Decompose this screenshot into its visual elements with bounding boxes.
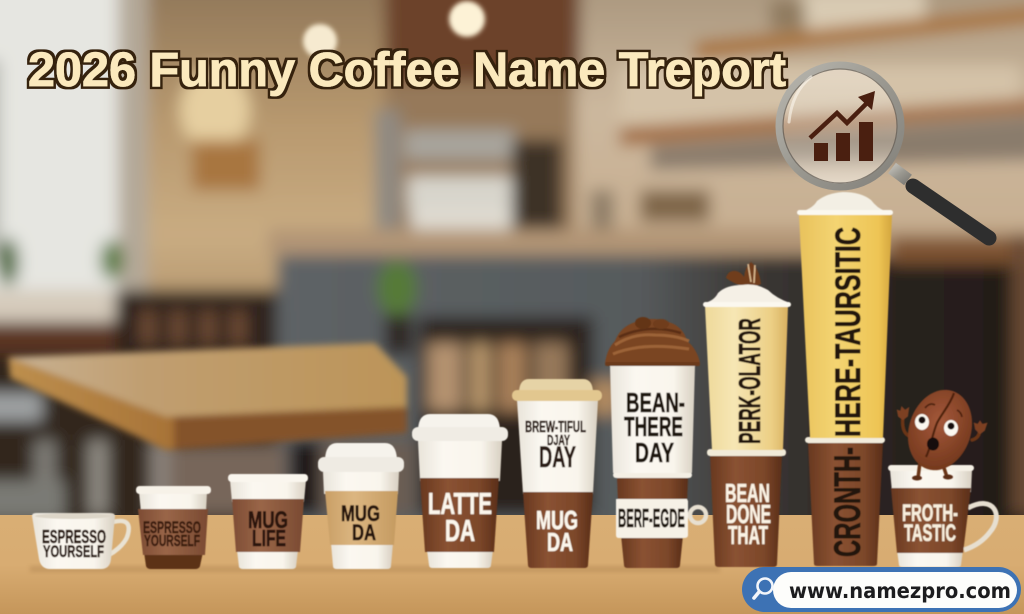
muffin topping <box>605 317 700 366</box>
label: mug da <box>536 505 578 557</box>
label: mug da: MUG <box>536 505 578 535</box>
label: mug da <box>341 501 380 545</box>
icon: surprised coffee bean mascot <box>898 381 986 480</box>
cup 7: bean-there day / berf-egde <box>605 317 706 568</box>
wooden tabletop <box>0 515 1024 614</box>
cup 9: tallest bar, cronth-here-taursitic <box>797 192 893 566</box>
label: bean-there day: DAY <box>635 437 674 468</box>
label: espresso yourself <box>143 518 201 550</box>
label: bean-there day: THERE <box>624 411 683 442</box>
label: brew-tiful day: DAY <box>539 441 576 474</box>
label: cronth-: CRONTH- <box>827 447 868 557</box>
label: mug da: DA <box>547 527 573 557</box>
label: bean done that: BEAN <box>725 478 770 508</box>
label: mug da: MUG <box>341 501 380 526</box>
cup 7: bean-there day / berf-egde: BERF-EGDE <box>618 503 685 533</box>
label: brew-tiful day: DJAY <box>547 432 570 449</box>
icon: bars and rising arrow <box>810 91 875 161</box>
label: brew-tiful day: BREW-TIFUL <box>525 419 586 436</box>
label: espresso yourself: ESPRESSO <box>143 518 201 537</box>
ceiling light: left <box>303 24 337 58</box>
cup 8: perk-olator / bean done that <box>703 262 791 567</box>
ceiling light: right <box>449 1 485 37</box>
chocolate and whipped cream <box>703 262 791 307</box>
label: mug life: LIFE <box>252 525 286 551</box>
label: mug life: MUG <box>248 507 288 534</box>
magnifying glass with growth chart <box>779 65 989 238</box>
label: froth-tastic <box>902 500 958 547</box>
label: mug life <box>248 507 288 551</box>
label: espresso yourself: ESPRESSO <box>42 527 106 547</box>
cup 3: mug life <box>228 474 308 569</box>
cup 4: mug da kraft sleeve <box>318 443 404 569</box>
label: mug da: DA <box>352 520 376 545</box>
label: bean-there day: BEAN- <box>626 387 685 418</box>
label: latte da: DA <box>445 513 475 548</box>
cup 2: espresso yourself short cup <box>136 486 211 569</box>
label: latte da <box>428 486 492 548</box>
label: espresso yourself <box>42 527 106 561</box>
website badge <box>742 567 1021 612</box>
website url: www.namezpro.com <box>789 579 1011 603</box>
label: bean-there day <box>624 387 685 468</box>
label: espresso yourself: YOURSELF <box>43 542 104 561</box>
label: froth-tastic: FROTH- <box>902 500 958 527</box>
cup 5: latte da <box>412 414 508 568</box>
label: latte da: LATTE <box>428 486 492 521</box>
label: brew-tiful day <box>525 419 586 474</box>
label: froth-tastic: TASTIC <box>904 520 956 547</box>
title: 2026 Funny Coffee Name Treport <box>28 44 786 97</box>
cup 6: brew-tiful day / mug da <box>512 379 602 568</box>
label: perk-olator: PERK-OLATOR <box>732 318 767 444</box>
label: bean done that: THAT <box>728 520 768 550</box>
label: bean done that <box>725 478 771 550</box>
icon: search magnifier <box>754 578 772 598</box>
label: bean done that: DONE <box>726 499 771 529</box>
cup 1: espresso yourself mug <box>32 513 129 569</box>
cup 10: froth-tastic mug <box>888 465 996 567</box>
label: here-taursitic: HERE-TAURSITIC <box>829 227 868 437</box>
label: espresso yourself: YOURSELF <box>144 533 200 550</box>
